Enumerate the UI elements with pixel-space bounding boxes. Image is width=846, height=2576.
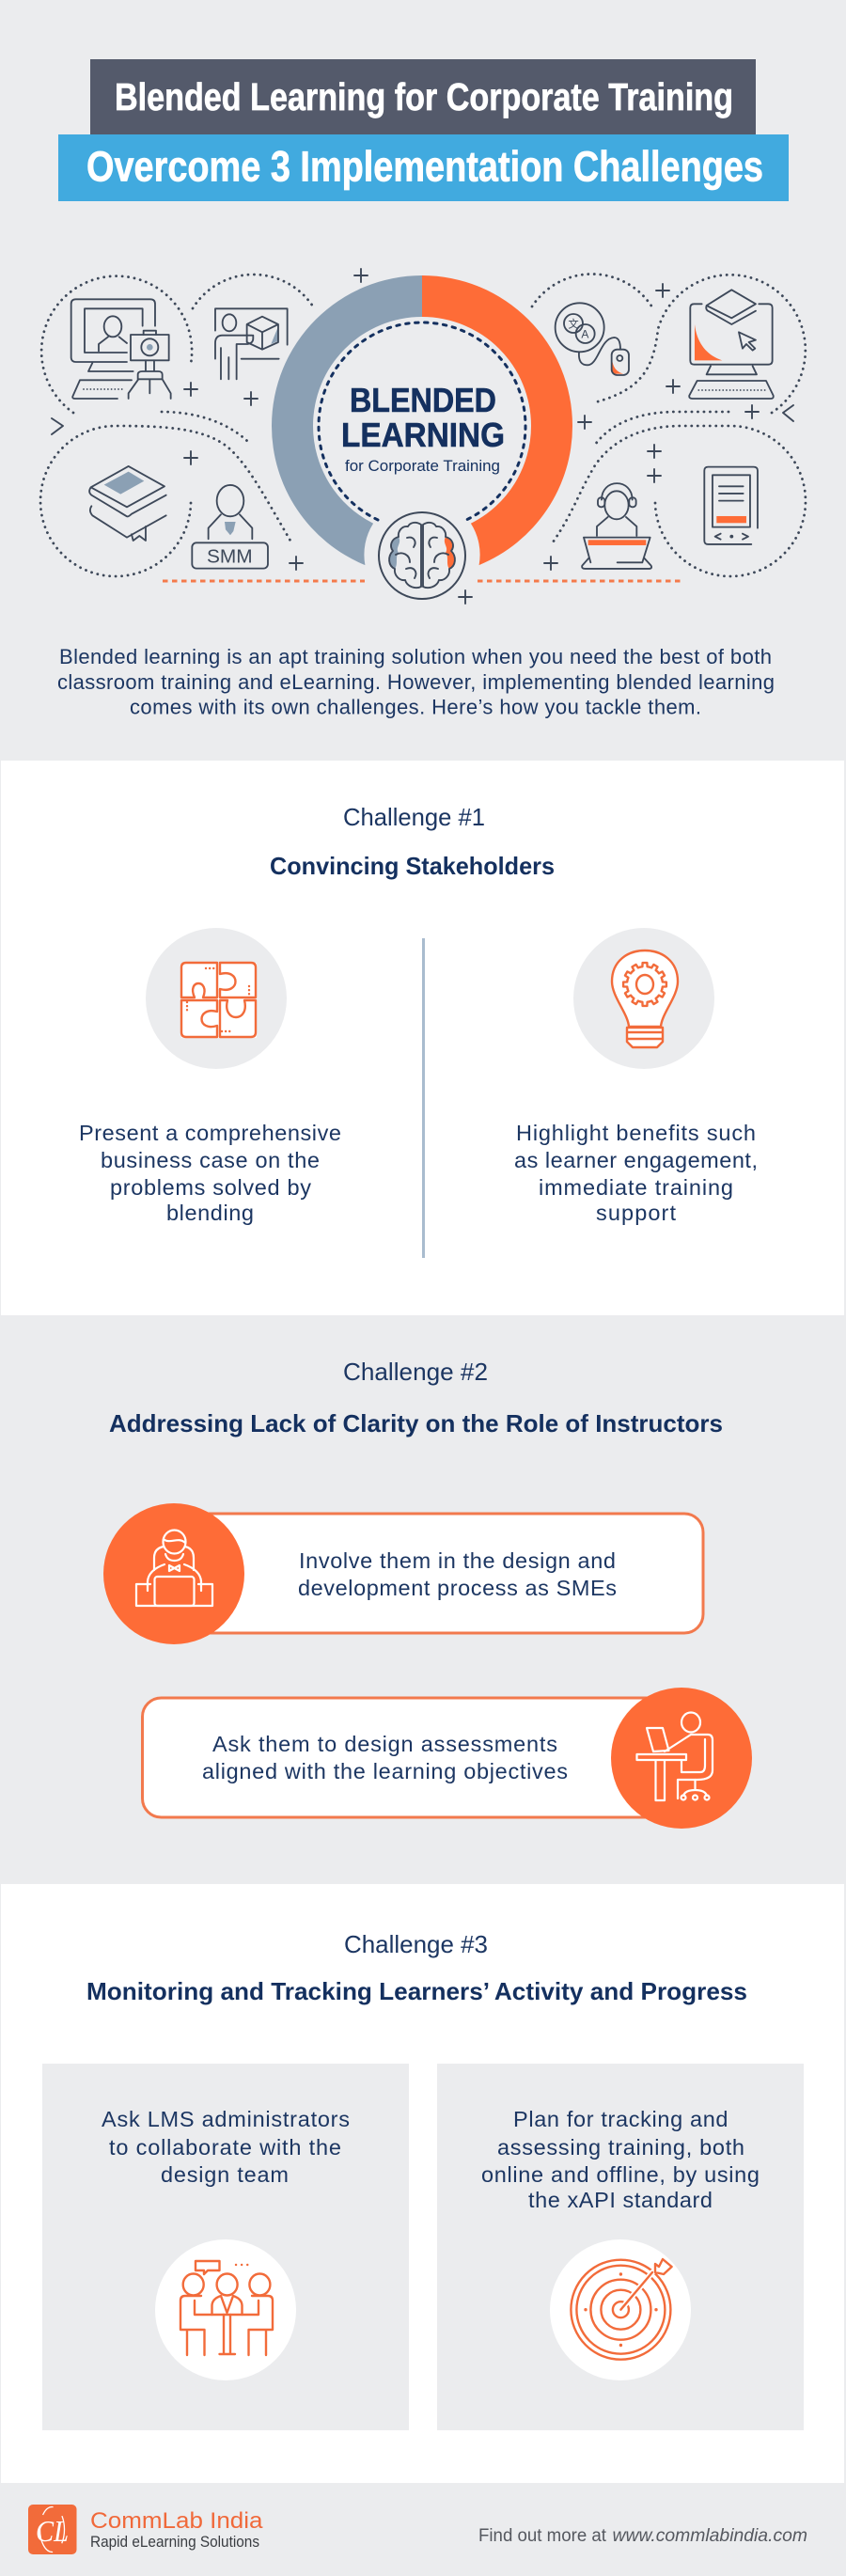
left text [79,1121,341,1225]
icon: SMM person: SMM [207,545,253,567]
card 2 text: Ask them to design assessments [212,1732,557,1756]
challenge 1 heading: Convincing Stakeholders [270,852,555,880]
icon: light bulb with gear [573,928,714,1069]
icon: person at desk [611,1688,752,1829]
challenge 2 heading: Addressing Lack of Clarity on the Role of Instructors [109,1409,723,1437]
website call to action: www.commlabindia.com [613,2526,807,2546]
card 1 text: development process as SMEs [298,1576,617,1600]
icon: translation mouse: 文 [568,318,579,331]
challenge 3 label: Challenge #3 [344,1930,488,1958]
orange dashed baselines [163,579,682,583]
ring centre title: LEARNING [341,416,505,454]
panel: challenge 1 [1,761,844,1315]
logo mark [28,2505,77,2554]
card: involve them [103,1503,703,1644]
left text: business case on the [101,1148,320,1172]
icon: puzzle [146,928,287,1069]
brand name: CommLab India [90,2508,263,2534]
icon: books [89,466,166,541]
card text: Ask LMS administrators [102,2107,350,2131]
card text: to collaborate with the [109,2135,341,2160]
icon: translation mouse [556,303,629,375]
plus marks and chevrons [52,269,793,604]
card 2 text: aligned with the learning objectives [202,1759,568,1783]
card text: the xAPI standard [528,2188,713,2212]
card: tracking xAPI [437,2064,804,2430]
card text: online and offline, by using [481,2162,760,2187]
hero illustration [40,269,806,604]
card text: assessing training, both [497,2135,744,2160]
footer [28,2505,807,2554]
right text [514,1121,758,1225]
divider [422,938,425,1258]
intro paragraph: comes with its own challenges. Here’s how you tackle them. [130,696,701,718]
icon: headset learner with laptop [582,483,651,569]
right text: Highlight benefits such [516,1121,756,1145]
donut ring: orange half [422,275,572,565]
icon: translation mouse: A [581,327,588,340]
right text: support [596,1201,676,1225]
card text: design team [161,2162,289,2187]
card text: Plan for tracking and [513,2107,728,2131]
ring centre title: BLENDED [350,381,496,419]
card text [481,2107,760,2212]
left text: Present a comprehensive [79,1121,341,1145]
donut ring: grey half [272,275,422,565]
intro paragraph [57,645,775,718]
left text: problems solved by [110,1175,311,1200]
panel: challenge 2 [103,1358,752,1829]
intro paragraph: classroom training and eLearning. However, implementing blended learning [57,670,775,694]
logo mark: CL [36,2514,69,2548]
title banner [58,59,789,201]
dotted connector paths [40,274,806,576]
icon: brain [379,512,465,599]
title line 1: Blended Learning for Corporate Training [115,75,733,118]
card: LMS administrators [42,2064,409,2430]
challenge 2 label: Challenge #2 [343,1358,488,1386]
card 2 text [202,1732,568,1783]
icon: instructor with cube [215,308,288,379]
challenge 1 label: Challenge #1 [343,803,485,831]
card 1 text: Involve them in the design and [299,1548,616,1573]
right text: immediate training [539,1175,733,1200]
ring centre title [341,381,505,475]
panel: challenge 3 [1,1884,844,2483]
right text: as learner engagement, [514,1148,758,1172]
inner dashed circle [319,322,525,520]
icon: computer with book and cursor [689,290,774,399]
tagline: Rapid eLearning Solutions [90,2533,259,2551]
icon: SMM person [192,485,268,569]
title line 1 [90,59,756,134]
challenge 3 heading: Monitoring and Tracking Learners’ Activity and Progress [86,1977,747,2005]
icon: person at laptop [103,1503,244,1644]
intro paragraph: Blended learning is an apt training solution when you need the best of both [59,645,772,668]
card text [102,2107,350,2187]
icon: target with arrow [550,2239,691,2380]
website call to action [478,2526,807,2546]
title line 2 [58,134,789,201]
icon: team meeting [155,2239,296,2380]
icon: monitor and camera [71,299,171,399]
card 1 text [298,1548,617,1600]
icon: tablet [704,467,758,544]
card: ask them [143,1688,752,1829]
left text: blending [166,1201,254,1225]
website call to action: Find out more at [478,2526,607,2546]
ring centre title: for Corporate Training [345,457,500,475]
